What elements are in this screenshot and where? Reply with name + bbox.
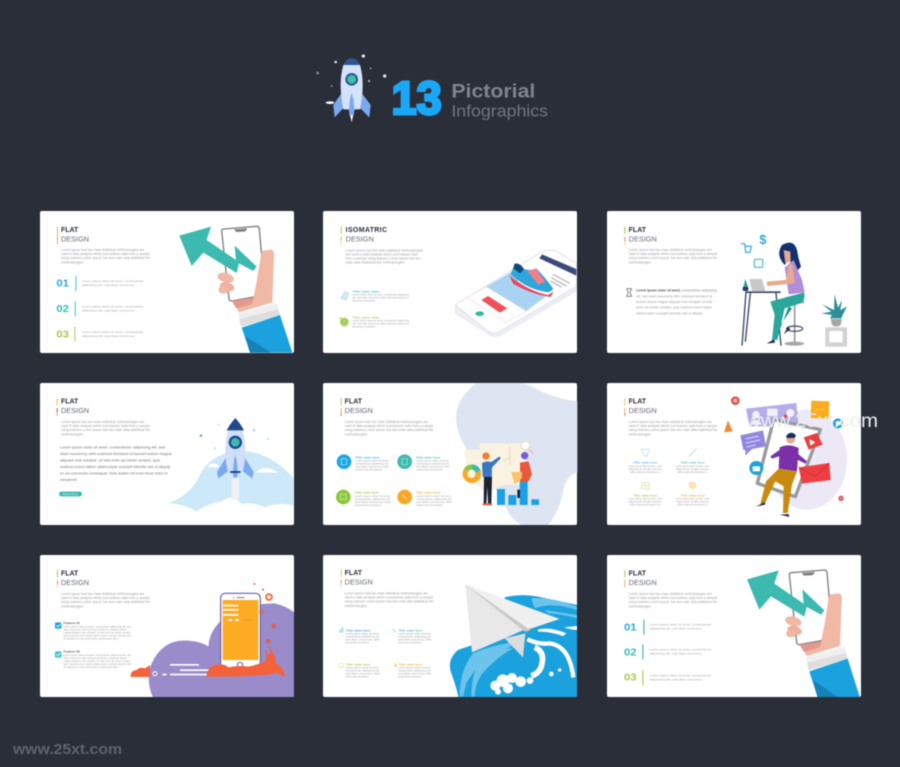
body text: nostrud exerci tation ullamcorper suscipit lobortis nisl ut aliquip bbox=[60, 464, 171, 469]
text block: using indexes Lorem ipsum has two main data statistical the bbox=[61, 428, 150, 432]
title: DESIGN bbox=[345, 577, 373, 586]
panel: slide 2 isometric phone bbox=[323, 211, 577, 353]
feature item 1: nibh euismod tincidunt ut bbox=[630, 471, 660, 474]
feature item 2: Title state here bbox=[681, 461, 705, 465]
text block: main data statistical the methodologies bbox=[346, 261, 405, 265]
feature item green: euismod tincidunt bbox=[355, 504, 382, 507]
feature item 2: consectetuer adipiscing elit, bbox=[398, 636, 432, 639]
title: FLAT bbox=[61, 399, 79, 406]
feature 02: Lorem ipsum dolor sit amet, consectetuer adipiscing elit, sed bbox=[63, 654, 132, 657]
illustration: rocket launch over clouds bbox=[168, 418, 293, 511]
list item 03 bbox=[624, 670, 711, 685]
body text: aliquam erat volutpat. Ut wisi enim ad minim veniam, quis bbox=[60, 457, 160, 462]
feature item 2: elit, sed diam nonummy nibh euismod tincidunt ut bbox=[352, 323, 409, 326]
feature item 1: Lorem ipsum dolor sit amet, bbox=[345, 633, 380, 636]
button: Read More bbox=[63, 492, 79, 496]
feature item 3: Title state here bbox=[346, 662, 371, 666]
feature item 4 bbox=[393, 662, 432, 679]
text block: Lorem ipsum has two main statistical methodologies are bbox=[629, 248, 712, 252]
text block: used in data analysis which summarizes data from a sample bbox=[629, 596, 718, 600]
body text: diam nonummy nibh euismod tincidunt ut laoreet dolore magna bbox=[60, 451, 172, 456]
feature item 4: adipiscing elit, sed diam nonummy bbox=[676, 501, 710, 504]
feature item 1: Title state here bbox=[346, 628, 371, 632]
feature 02: diam nonummy nibh euismod tincidunt ut laoreet dolore bbox=[63, 657, 127, 660]
illustration: hand holding phone with arrow bbox=[179, 226, 292, 353]
text block: Lorem ipsum has two main statistical methodologies are bbox=[345, 420, 428, 424]
feature item teal: sed diam nonummy nibh bbox=[416, 466, 450, 469]
feature item 2: sed diam nonummy nibh bbox=[398, 639, 432, 642]
panel: slide 6 social media man bbox=[607, 383, 861, 525]
text block: methodologies bbox=[629, 261, 651, 265]
text block: using indexes Lorem ipsum has two main data statistical the bbox=[345, 599, 434, 603]
feature 02: ut aliquip ex ea commodo consequat duis bbox=[63, 666, 119, 669]
button bbox=[59, 492, 82, 496]
panel: slide 5 chart team bbox=[323, 383, 577, 525]
feature item teal: Lorem ipsum dolor sit amet, bbox=[416, 460, 450, 463]
background blob bbox=[456, 383, 577, 525]
body text: elit, sed diam nonummy nibh euismod tincidunt ut bbox=[636, 294, 712, 298]
feature 01: magna aliquam erat volutpat. Ut wisi enim ad minim veniam, bbox=[63, 631, 131, 634]
list item 01: Lorem ipsum dolor sit amet, consectetuer bbox=[82, 279, 144, 283]
text block: from a sample using indexes Lorem ipsum has two bbox=[346, 256, 421, 260]
body text: hendrerit bbox=[60, 477, 78, 482]
feature item teal bbox=[397, 454, 450, 471]
list item 03: adipiscing elit, sed diam nonummy bbox=[650, 678, 703, 682]
title: DESIGN bbox=[629, 406, 657, 415]
list item 02 bbox=[624, 644, 711, 659]
title: FLAT bbox=[629, 399, 647, 406]
feature item 1: Title state data bbox=[352, 289, 379, 293]
title bbox=[341, 569, 373, 587]
text block: used in data analysis which summarizes data from a sample bbox=[61, 424, 150, 428]
feature item 2: Lorem ipsum dolor sit amet, bbox=[398, 633, 432, 636]
feature item 3: Lorem ipsum dolor sit amet, cons bbox=[629, 498, 663, 501]
text block bbox=[61, 248, 150, 265]
feature item 2: Title state here bbox=[399, 628, 422, 632]
feature item green: Lorem ipsum dolor sit amet, bbox=[355, 495, 391, 498]
text block bbox=[629, 248, 718, 265]
panel: slide 8 paper plane bbox=[323, 555, 577, 698]
text block bbox=[345, 591, 434, 608]
list item 03: adipiscing elit, sed diam nonummy bbox=[82, 334, 135, 338]
text block: methodologies bbox=[345, 604, 367, 608]
feature item 3: nibh euismod tincidunt ut bbox=[630, 504, 660, 507]
title bbox=[57, 570, 89, 588]
feature item blue: sed diam nonummy nibh bbox=[355, 466, 389, 469]
title: DESIGN bbox=[61, 406, 89, 415]
title: FLAT bbox=[61, 227, 79, 234]
feature item 1: Lorem ipsum dolor sit amet, consectetur adipiscing bbox=[352, 294, 410, 297]
title: ISOMATRIC bbox=[346, 227, 387, 234]
list item 03: Lorem ipsum dolor sit amet, consectetuer bbox=[650, 674, 711, 678]
text block: Lorem ipsum has two main statistical methodologies bbox=[346, 248, 423, 252]
feature item 2: Lorem ipsum dolor sit amet, consectetur adipiscing bbox=[352, 320, 410, 323]
illustration: isometric phone with shoe bbox=[455, 250, 576, 337]
list item 03: 03 bbox=[56, 329, 69, 340]
feature item orange bbox=[397, 490, 453, 507]
feature item 3 bbox=[339, 662, 380, 679]
feature item green bbox=[336, 490, 391, 507]
title: FLAT bbox=[629, 571, 647, 578]
text block: using indexes Lorem ipsum has two main data statistical the bbox=[629, 600, 718, 604]
footer watermark: www.25xt.com bbox=[12, 741, 122, 758]
list item 01 bbox=[624, 620, 711, 635]
title: DESIGN bbox=[61, 578, 89, 587]
list item 02: 02 bbox=[624, 647, 637, 658]
header logo bbox=[316, 54, 548, 124]
background cloud bbox=[149, 603, 295, 698]
feature 01: Feature 01 bbox=[63, 621, 80, 625]
body text bbox=[636, 289, 717, 315]
feature 02: Feature 02 bbox=[63, 650, 80, 654]
feature 01: diam nonummy nibh euismod tincidunt ut laoreet dolore bbox=[63, 628, 127, 631]
feature item 1: consectetuer adipiscing elit, bbox=[345, 636, 380, 639]
feature 01 bbox=[55, 621, 132, 640]
text block: methodologies bbox=[345, 433, 367, 437]
list item 01: adipiscing elit, sed diam nonummy bbox=[82, 283, 135, 287]
list item 02 bbox=[56, 301, 144, 316]
feature item orange: Title state here bbox=[416, 491, 441, 495]
title bbox=[624, 570, 657, 587]
text block bbox=[346, 248, 423, 265]
feature item 2 bbox=[339, 315, 410, 329]
body text: Lorem ipsum dolor sit amet, consectetuer adipiscing bbox=[636, 289, 717, 293]
feature item 1 bbox=[339, 627, 380, 645]
text block: methodologies bbox=[61, 605, 84, 609]
text block: methodologies bbox=[61, 433, 84, 437]
feature item 4 bbox=[676, 482, 710, 507]
text block: Lorem ipsum has two main statistical methodologies are bbox=[61, 420, 145, 424]
feature item green: sed diam nonummy nibh bbox=[355, 501, 391, 504]
feature item 4: consectetuer adipiscing elit, bbox=[398, 670, 432, 673]
feature item 2: laoreet dolore bbox=[352, 326, 376, 329]
feature item orange: Lorem ipsum dolor sit amet, bbox=[416, 495, 452, 498]
feature item teal: Title state here bbox=[416, 455, 441, 459]
feature item 3 bbox=[629, 482, 663, 507]
text block: are used in data analysis which summarizes data bbox=[346, 252, 418, 256]
heading: Infographics: Infographics bbox=[451, 103, 548, 121]
title: DESIGN bbox=[61, 234, 89, 243]
panel: slide 3 woman at desk bbox=[607, 211, 861, 353]
list item 01: Lorem ipsum dolor sit amet, consectetuer bbox=[650, 623, 711, 627]
feature item 1 bbox=[629, 449, 663, 474]
feature 01: Lorem ipsum dolor sit amet, consectetuer adipiscing elit, sed bbox=[63, 625, 132, 628]
feature item orange: sed diam nonummy nibh bbox=[416, 501, 453, 504]
text block: used in data analysis which summarizes data from a sample bbox=[345, 595, 434, 599]
feature item 2: Title state data bbox=[352, 315, 379, 319]
feature item orange: consectetuer adipiscing elit, bbox=[416, 498, 452, 501]
text block: methodologies bbox=[629, 605, 651, 609]
feature item blue: euismod tincidunt bbox=[355, 468, 382, 471]
feature item 3: adipiscing elit, sed diam nonummy bbox=[629, 501, 663, 504]
feature 02: magna aliquam erat volutpat. Ut wisi enim ad minim veniam, bbox=[63, 660, 131, 663]
feature item 4: nibh euismod tincidunt ut bbox=[677, 504, 708, 507]
panel: slide 9 phone arrow bbox=[607, 555, 861, 698]
feature item 2: Lorem ipsum dolor sit amet, cons bbox=[676, 465, 710, 468]
feature item 1: Lorem ipsum dolor sit amet, cons bbox=[629, 465, 663, 468]
feature item 4: Title state here bbox=[681, 493, 705, 497]
title bbox=[624, 227, 657, 245]
title bbox=[341, 227, 387, 245]
list item 03: Lorem ipsum dolor sit amet, consectetuer bbox=[82, 330, 144, 334]
text block: methodologies bbox=[629, 433, 651, 437]
list item 03: 03 bbox=[624, 673, 637, 684]
text block bbox=[61, 592, 150, 609]
body text: enim ad minim veniam, quis nostrud exerci tation bbox=[636, 306, 712, 310]
body text: laoreet dolore magna aliquam erat volutpat. Ut wisi bbox=[636, 300, 712, 304]
text block bbox=[61, 420, 150, 437]
text block bbox=[629, 420, 718, 437]
illustration: phone with orange screen bbox=[131, 583, 285, 677]
feature item 2: euismod tincidunt bbox=[398, 642, 422, 645]
body text: ullamcorper suscipit lobortis nisl ut aliquip. bbox=[636, 311, 704, 315]
feature item 1: laoreet dolore bbox=[352, 300, 376, 303]
feature item 4: sed diam nonummy nibh bbox=[398, 673, 432, 676]
body text: ex ea commodo consequat. Duis autem vel eum iriure dolor in bbox=[60, 471, 168, 476]
title: FLAT bbox=[345, 399, 363, 406]
text block: used in data analysis which summarizes data from a sample bbox=[629, 252, 718, 256]
text block bbox=[629, 592, 718, 609]
feature item blue: Title state here bbox=[355, 455, 380, 459]
text block: Lorem ipsum has two main statistical methodologies are bbox=[61, 592, 145, 596]
text block: used in data analysis which summarizes data from a sample bbox=[61, 252, 150, 256]
feature item 2: adipiscing elit, sed diam nonummy bbox=[676, 468, 710, 471]
list item 03 bbox=[56, 327, 144, 342]
feature 02 bbox=[55, 650, 132, 669]
text block: using indexes Lorem ipsum has two main data statistical the bbox=[629, 428, 718, 432]
title: DESIGN bbox=[345, 406, 373, 415]
feature item 3: sed diam nonummy nibh bbox=[345, 673, 380, 676]
number 13: 13 bbox=[392, 72, 442, 124]
feature item blue bbox=[337, 454, 389, 471]
feature item 4: Title state here bbox=[399, 662, 422, 666]
feature item green: consectetuer adipiscing elit, bbox=[355, 498, 391, 501]
feature item 2 bbox=[393, 628, 432, 645]
title bbox=[57, 227, 89, 244]
list item 02: Lorem ipsum dolor sit amet, consectetuer bbox=[82, 304, 144, 308]
list item 02: adipiscing elit, sed diam nonummy bbox=[650, 652, 703, 656]
title: DESIGN bbox=[629, 234, 657, 243]
body text: Lorem ipsum dolor sit amet, consectetuer adipiscing elit, sed bbox=[60, 444, 165, 449]
icon: rocket bbox=[316, 54, 386, 122]
text block: used in data analysis which summarizes data from a sample bbox=[345, 424, 434, 428]
text block: using indexes Lorem ipsum has two main data statistical the bbox=[61, 600, 150, 604]
feature item 1: Title state here bbox=[633, 461, 658, 465]
panel: slide 1 phone arrow bbox=[40, 211, 294, 353]
feature item blue: consectetuer adipiscing elit, bbox=[355, 463, 389, 466]
title: FLAT bbox=[345, 570, 363, 577]
watermark: www.25xt.com center right: www.25xt.com bbox=[745, 411, 878, 432]
feature item teal: consectetuer adipiscing elit, bbox=[416, 463, 450, 466]
feature item 1 bbox=[341, 289, 410, 303]
illustration: woman at desk: $ bbox=[759, 233, 766, 247]
text block: using indexes Lorem ipsum has two main data statistical the bbox=[345, 428, 434, 432]
text block: Lorem ipsum has two main statistical methodologies are bbox=[629, 420, 712, 424]
feature item 4: euismod tincidunt bbox=[398, 676, 422, 679]
text block: Lorem ipsum has two main statistical methodologies are bbox=[61, 248, 145, 252]
title bbox=[341, 398, 373, 416]
feature item green: Title state here bbox=[355, 491, 379, 495]
feature item 1: euismod tincidunt bbox=[345, 642, 369, 645]
title: FLAT bbox=[61, 571, 79, 578]
feature 01: quis nostrud exerci tation ullamcorper suscipit lobortis nisl bbox=[63, 634, 131, 637]
text block: used in data analysis which summarizes data from a sample bbox=[629, 424, 718, 428]
feature item 4: Lorem ipsum dolor sit amet, bbox=[398, 667, 432, 670]
feature item 4: Lorem ipsum dolor sit amet, cons bbox=[676, 498, 710, 501]
feature 01: ut aliquip ex ea commodo consequat duis bbox=[63, 637, 119, 640]
feature 02: quis nostrud exerci tation ullamcorper suscipit lobortis nisl bbox=[63, 663, 131, 666]
illustration: hand holding phone with arrow bbox=[747, 570, 860, 698]
panel: slide 4 rocket bbox=[40, 383, 294, 525]
text block: Lorem ipsum has two main statistical methodologies are bbox=[345, 591, 428, 595]
list item 01: 01 bbox=[56, 279, 69, 290]
title: DESIGN bbox=[346, 234, 374, 243]
list item 02: 02 bbox=[56, 304, 69, 315]
icon: hourglass bbox=[627, 289, 632, 296]
feature item 2: nibh euismod tincidunt ut bbox=[677, 471, 708, 474]
list item 02: adipiscing elit, sed diam nonummy bbox=[82, 308, 135, 312]
body text bbox=[60, 444, 172, 482]
illustration: people with charts bbox=[463, 441, 539, 505]
feature item teal: euismod tincidunt bbox=[416, 468, 443, 471]
feature item 3: euismod tincidunt bbox=[345, 676, 369, 679]
panel: slide 7 phone on purple cloud bbox=[40, 555, 295, 698]
title bbox=[624, 398, 657, 416]
title bbox=[57, 398, 89, 416]
heading: Pictorial: Pictorial bbox=[451, 81, 535, 102]
feature item orange: euismod tincidunt bbox=[416, 504, 443, 507]
illustration: paper plane above ocean bbox=[450, 584, 577, 698]
list item 01 bbox=[56, 276, 144, 291]
list item 01: 01 bbox=[624, 622, 637, 633]
feature item 3: Title state here bbox=[633, 493, 658, 497]
text block: used in data analysis which summarizes data from a sample bbox=[61, 596, 150, 600]
list item 02: Lorem ipsum dolor sit amet, consectetuer bbox=[650, 648, 711, 652]
feature item 1: adipiscing elit, sed diam nonummy bbox=[629, 468, 663, 471]
feature item 2 bbox=[676, 449, 710, 474]
feature item 3: Lorem ipsum dolor sit amet, bbox=[345, 667, 380, 670]
feature item 1: sed diam nonummy nibh bbox=[345, 639, 380, 642]
title: DESIGN bbox=[629, 578, 657, 587]
feature item 3: consectetuer adipiscing elit, bbox=[345, 670, 380, 673]
illustration: man stepping out of phone bbox=[724, 396, 847, 517]
text block bbox=[345, 420, 434, 437]
text block: using indexes Lorem ipsum has two main data statistical the bbox=[61, 256, 150, 260]
feature item 1: elit, sed diam nonummy nibh euismod tincidunt ut bbox=[352, 297, 409, 300]
text block: methodologies bbox=[61, 261, 84, 265]
feature item blue: Lorem ipsum dolor sit amet, bbox=[355, 460, 389, 463]
illustration: woman at desk bbox=[741, 233, 847, 347]
text block: using indexes Lorem ipsum has two main data statistical the bbox=[629, 256, 718, 260]
text block: Lorem ipsum has two main statistical methodologies are bbox=[629, 592, 712, 596]
list item 01: adipiscing elit, sed diam nonummy bbox=[650, 627, 703, 631]
title: FLAT bbox=[629, 227, 647, 234]
